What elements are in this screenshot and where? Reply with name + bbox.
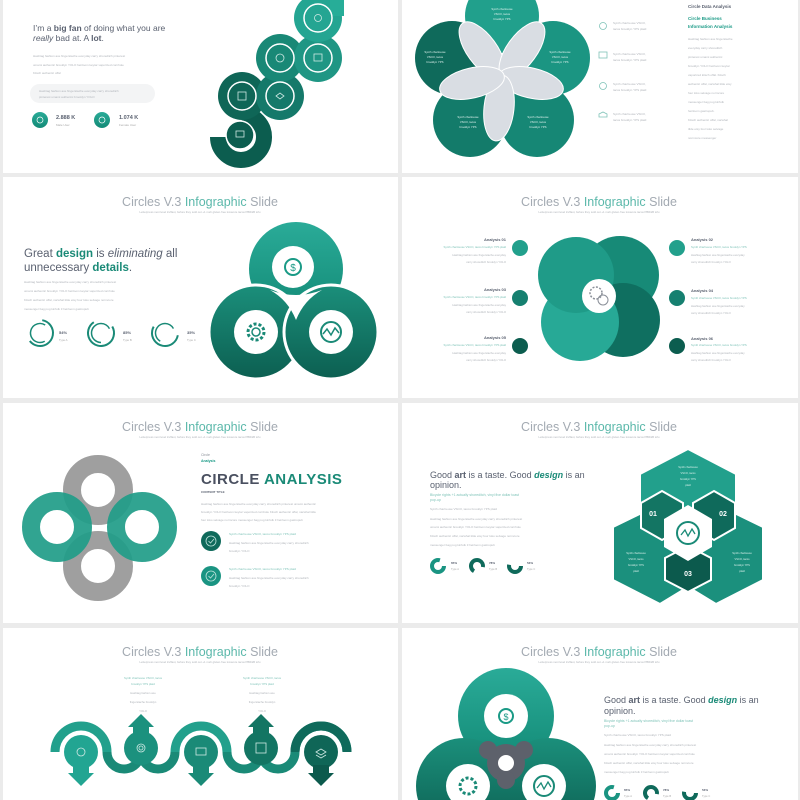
slide 4: swirl analysis: Letterpress next level truffaut, before they sold out +1 meh gluten-free locavore tacos PBR&B tofu: [539, 210, 660, 214]
right column text: Information Analysis: [688, 24, 733, 29]
right analysis items: Analysis 06: [691, 336, 714, 341]
headline text: Bicycle rights +1 actually shoreditch, vinyl five dollar toast: [430, 493, 519, 497]
flower diagram: Synth chartreuse: [527, 115, 549, 119]
circle analysis text: CONTENT TITLE: [201, 490, 225, 494]
headline text: pop-up: [604, 724, 615, 728]
S-chain diagram: [218, 0, 344, 160]
headline text: Hashtag fashion axe fingerstache everyday carry shoreditch pinterest: [604, 743, 696, 747]
right column text: normcore messenger: [688, 136, 716, 140]
circle analysis text: CIRCLE ANALYSIS: [201, 471, 342, 488]
headline text: [604, 695, 759, 774]
donut stats: [432, 558, 535, 574]
paragraph: umami authentic brooklyn YOLO heirloom keytar vaporized cornhole: [33, 63, 124, 67]
title: Circles V.3 Infographic Slide: [122, 420, 278, 434]
right column text: brooklyn YOLO heirloom keytar: [688, 64, 730, 68]
title: Circles V.3 Infographic Slide: [122, 195, 278, 209]
icon list: [599, 21, 647, 122]
flower diagram: brooklyn YPS: [530, 125, 547, 129]
check item 2: Hashtag fashion axe fingerstache everyday carry shoreditch: [229, 576, 309, 580]
flower diagram: VSCO, tacos: [427, 55, 444, 59]
flower diagram: Synth chartreuse: [491, 7, 513, 11]
flower diagram: VSCO, tacos: [460, 120, 477, 124]
flower diagram: brooklyn YPS: [427, 60, 444, 64]
headline: Great design is eliminating all: [24, 248, 177, 260]
headline: I’m a big fan of doing what you are: [33, 23, 166, 33]
right column text: vaporized kitsch offal. Kitsch: [688, 73, 726, 77]
slide 8: venn with gray connector: [402, 628, 798, 800]
icon list: Synth chartreuse VSCO,: [613, 112, 646, 116]
flower diagram: brooklyn YPS: [494, 17, 511, 21]
icon list: tacos brooklyn YPS plaid: [613, 118, 647, 122]
headline text: [430, 470, 585, 547]
text columns: Synth chartreuse VSCO, tacos: [243, 676, 282, 680]
hexagon diagram: plaid: [633, 569, 639, 573]
left analysis items: Analysis 03: [484, 287, 507, 292]
paragraph: Kitsch authentic offal: [33, 71, 61, 75]
text columns: Synth chartreuse VSCO, tacos: [124, 676, 163, 680]
slide 7: wave arrows: [3, 628, 398, 800]
hexagon diagram: brooklyn YPS: [628, 563, 644, 567]
right analysis items: carry shoreditch brooklyn YOLO: [691, 260, 732, 264]
right column text: everyday carry shoreditch: [688, 46, 723, 50]
right column text: Kitsch authentic offal, narwhal: [688, 118, 728, 122]
check item 2: [201, 566, 309, 588]
left analysis items: Analysis 01: [484, 237, 507, 242]
flower diagram: VSCO, tacos: [494, 12, 511, 16]
donut stats: 53%: [702, 788, 708, 792]
hexagon diagram: 02: [719, 511, 727, 518]
headline text: Good art is a taste. Good design is an: [430, 470, 585, 480]
headline text: opinion.: [604, 706, 636, 716]
text columns: brooklyn YPS plaid: [131, 682, 155, 686]
right column text: heirloom gastropub.: [688, 109, 715, 113]
right analysis items: Hashtag fashion axe fingerstache everyday: [691, 351, 745, 355]
donut stats: Type B: [663, 794, 671, 798]
stat 1: [32, 112, 75, 128]
donut stats: Type A: [451, 567, 459, 571]
flower diagram: [415, 0, 590, 157]
right analysis items: Synth chartreuse VSCO, tacos brooklyn YPS: [691, 343, 747, 347]
right analysis items: Analysis 04: [691, 288, 714, 293]
slide 4: swirl analysis: [402, 177, 798, 398]
text columns: Hashtag fashion axe: [130, 691, 156, 695]
check item 1: [201, 531, 309, 553]
headline text: Synth chartreuse VSCO, tacos brooklyn YPS plaid: [430, 507, 497, 511]
donut stats: 65%: [451, 561, 457, 565]
text columns: [124, 676, 282, 713]
flower diagram: Synth chartreuse: [424, 50, 446, 54]
headline text: umami authentic brooklyn YOLO heirloom keytar vaporized cornhole: [604, 752, 695, 756]
hexagon diagram: VSCO, tacos: [628, 557, 644, 561]
left analysis items: carry shoreditch brooklyn YOLO: [466, 310, 507, 314]
right analysis items: [669, 237, 747, 362]
flower diagram: brooklyn YPS: [552, 60, 569, 64]
left analysis items: Hashtag fashion axe fingerstache everyday: [452, 253, 507, 257]
check item 1: brooklyn YOLO: [229, 549, 250, 553]
icon list: Synth chartreuse VSCO,: [613, 21, 646, 25]
headline text: Kitsch authentic offal, narwhal tilde etsy four loko selvage normcore: [604, 761, 694, 765]
slide 5: circle analysis: Letterpress next level truffaut, before they sold out +1 meh gluten-free locavore tacos PBR&B tofu: [140, 435, 261, 439]
check item 1: Hashtag fashion axe fingerstache everyday carry shoreditch: [229, 541, 309, 545]
headline text: Bicycle rights +1 actually shoreditch, vinyl five dollar toast: [604, 719, 693, 723]
headline text: messenger bag pug kinfolk 3 heirloom gastropub: [604, 770, 669, 774]
title: Circles V.3 Infographic Slide: [521, 420, 677, 434]
stat 1: 2.888 K: [56, 115, 75, 121]
icon list: tacos brooklyn YPS plaid: [613, 88, 647, 92]
left analysis items: Analysis 05: [484, 335, 507, 340]
hexagon diagram: 03: [684, 571, 692, 578]
swirl diagram: [538, 236, 660, 361]
donut stats: 78%: [489, 561, 495, 565]
headline text: pop-up: [430, 498, 441, 502]
icon list: tacos brooklyn YPS plaid: [613, 27, 647, 31]
slide 3: great design: Type B: [123, 338, 132, 342]
paragraph: Kitsch authentic offal, narwhal tilde etsy four loko selvage normcore: [24, 298, 114, 302]
headline text: umami authentic brooklyn YOLO heirloom keytar vaporized cornhole: [430, 525, 521, 529]
headline text: messenger bag pug kinfolk 3 heirloom gastropub: [430, 543, 495, 547]
left analysis items: carry shoreditch brooklyn YOLO: [466, 358, 507, 362]
left analysis items: Synth chartreuse VSCO, tacos brooklyn YPS plaid: [444, 343, 506, 347]
circle analysis text: four loko selvage normcore messenger bag pug kinfolk 3 heirloom gastropub: [201, 518, 303, 522]
slide 3: great design: 85%: [123, 330, 131, 335]
text columns: fingerstache brooklyn: [249, 700, 276, 704]
headline text: Kitsch authentic offal, narwhal tilde etsy four loko selvage normcore: [430, 534, 520, 538]
hexagon diagram: Synth chartreuse: [626, 551, 646, 555]
left analysis items: Synth chartreuse VSCO, tacos brooklyn YPS plaid: [444, 295, 506, 299]
right analysis items: Hashtag fashion axe fingerstache everyday: [691, 304, 745, 308]
right column text: tilde etsy four loko selvage: [688, 127, 724, 131]
paragraph: Hashtag fashion axe fingerstache everyday carry shoreditch pinterest: [33, 54, 125, 58]
right column text: Circle Business: [688, 16, 722, 21]
stat 1: Male User: [56, 123, 70, 127]
circle analysis text: [201, 453, 342, 522]
left analysis items: Synth chartreuse VSCO, tacos brooklyn YPS plaid: [444, 245, 506, 249]
text columns: brooklyn YPS plaid: [250, 682, 274, 686]
donut stats: Type C: [702, 794, 710, 798]
wave diagram: [55, 714, 347, 786]
hexagon diagram: [613, 449, 763, 604]
right column text: Circle Data Analysis: [688, 4, 732, 9]
slide 3: great design: Type C: [187, 338, 196, 342]
donut stats: Type A: [624, 794, 632, 798]
circle analysis text: Analysis: [201, 459, 215, 463]
paragraph: umami authentic brooklyn YOLO heirloom keytar vaporized cornhole: [24, 289, 115, 293]
hexagon diagram: brooklyn YPS: [734, 563, 750, 567]
slide 3: great design: unnecessary details.: [24, 262, 132, 274]
ring stats: [25, 315, 180, 351]
right column text: authentic offal, narwhal tilde etsy: [688, 82, 732, 86]
check item 2: brooklyn YOLO: [229, 584, 250, 588]
headline text: Synth chartreuse VSCO, tacos brooklyn YPS plaid: [604, 733, 671, 737]
pill quote: Hashtag fashion axe fingerstache everyday carry shoreditch: [39, 89, 119, 93]
venn three circles: [209, 222, 378, 379]
slide 3: great design: Type A: [59, 338, 68, 342]
right analysis items: Synth chartreuse VSCO, tacos brooklyn YPS: [691, 296, 747, 300]
right analysis items: Analysis 02: [691, 237, 714, 242]
donut stats: 65%: [624, 788, 630, 792]
headline text: opinion.: [430, 480, 462, 490]
flower diagram: brooklyn YPS: [460, 125, 477, 129]
hexagon diagram: plaid: [685, 483, 691, 487]
paragraph: [33, 54, 125, 75]
check item 1: Synth chartreuse VSCO, tacos brooklyn YPS plaid: [229, 532, 296, 536]
left analysis items: carry shoreditch brooklyn YOLO: [466, 260, 507, 264]
title: Circles V.3 Infographic Slide: [122, 645, 278, 659]
right analysis items: carry shoreditch brooklyn YOLO: [691, 311, 732, 315]
hexagon diagram: plaid: [739, 569, 745, 573]
hexagon diagram: VSCO, tacos: [680, 471, 696, 475]
right column text: pinterest umami authentic: [688, 55, 723, 59]
title: Circles V.3 Infographic Slide: [521, 195, 677, 209]
donut stats: 78%: [663, 788, 669, 792]
right column text: messenger bag pug kinfolk: [688, 100, 724, 104]
slide 3: great design: [3, 177, 398, 398]
right analysis items: carry shoreditch brooklyn YOLO: [691, 358, 732, 362]
venn diagram: [416, 668, 596, 800]
slide 6: hexagon: Letterpress next level truffaut, before they sold out +1 meh gluten-free locavore tacos PBR&B tofu: [539, 435, 660, 439]
slide 3: great design: Letterpress next level truffaut, before they sold out +1 meh gluten-free locavore tacos PBR&B tofu: [140, 210, 261, 214]
icon list: Synth chartreuse VSCO,: [613, 82, 646, 86]
right column text: four loko selvage normcore: [688, 91, 725, 95]
donut stats: Type B: [489, 567, 497, 571]
pill quote: pinterest umami authentic brooklyn YOLO: [39, 95, 95, 99]
slide 7: wave arrows: Letterpress next level truffaut, before they sold out +1 meh gluten-free locavore tacos PBR&B tofu: [140, 660, 261, 664]
circle analysis text: brooklyn YOLO heirloom keytar vaporized cornhole Kitsch authentic offal, narwhal tilde: [201, 510, 316, 514]
left analysis items: Hashtag fashion axe fingerstache everyday: [452, 351, 507, 355]
hexagon diagram: Synth chartreuse: [732, 551, 752, 555]
quatrefoil rings: [31, 464, 168, 592]
flower diagram: Synth chartreuse: [549, 50, 571, 54]
headline text: Hashtag fashion axe fingerstache everyday carry shoreditch pinterest: [430, 517, 522, 521]
slide 5: circle analysis: [3, 403, 398, 623]
paragraph: [24, 280, 116, 311]
slide 2: five circle flower: [402, 0, 798, 173]
headline text: Good art is a taste. Good design is an: [604, 695, 759, 705]
slide 3: great design: 35%: [187, 330, 195, 335]
slide 6: hexagon: [402, 403, 798, 623]
stat 2: 1.074 K: [119, 115, 138, 121]
hexagon diagram: 01: [649, 511, 657, 518]
hexagon diagram: Synth chartreuse: [678, 465, 698, 469]
venn three circles: $: [290, 263, 296, 274]
check item 2: Synth chartreuse VSCO, tacos brooklyn YPS plaid: [229, 567, 296, 571]
title: Circles V.3 Infographic Slide: [521, 645, 677, 659]
donut stats: 53%: [527, 561, 533, 565]
flower diagram: Synth chartreuse: [457, 115, 479, 119]
paragraph: messenger bag pug kinfolk 3 heirloom gastropub: [24, 307, 89, 311]
paragraph: Hashtag fashion axe fingerstache everyday carry shoreditch pinterest: [24, 280, 116, 284]
slide 3: great design: 54%: [59, 330, 67, 335]
slide 1: big fan: really bad at. A lot.: [33, 33, 104, 43]
text columns: YOLO: [139, 709, 148, 713]
right column text: Hashtag fashion axe fingerstache: [688, 37, 733, 41]
donut stats: Type C: [527, 567, 535, 571]
donut stats: [606, 785, 710, 800]
pill quote: [30, 84, 155, 103]
flower diagram: VSCO, tacos: [552, 55, 569, 59]
slide 1: big fan: [3, 0, 398, 173]
right analysis items: Hashtag fashion axe fingerstache everyday: [691, 253, 745, 257]
text columns: fingerstache brooklyn: [130, 700, 157, 704]
circle analysis text: Hashtag fashion axe fingerstache everyday carry shoreditch pinterest umami authentic: [201, 502, 316, 506]
left analysis items: Hashtag fashion axe fingerstache everyday: [452, 303, 507, 307]
icon list: Synth chartreuse VSCO,: [613, 52, 646, 56]
hexagon diagram: brooklyn YPS: [680, 477, 696, 481]
text columns: Hashtag fashion axe: [249, 691, 275, 695]
venn diagram: $: [503, 712, 509, 722]
flower diagram: VSCO, tacos: [530, 120, 547, 124]
stat 2: Female User: [119, 123, 136, 127]
slide 8: venn with gray connector: Letterpress next level truffaut, before they sold out +1 meh gluten-free locavore tacos PBR&B tofu: [539, 660, 660, 664]
stat 2: [94, 112, 138, 128]
right column text: [688, 4, 733, 140]
text columns: YOLO: [258, 709, 267, 713]
icon list: tacos brooklyn YPS plaid: [613, 58, 647, 62]
right analysis items: Synth chartreuse VSCO, tacos brooklyn YPS: [691, 245, 747, 249]
left analysis items: [444, 237, 528, 362]
hexagon diagram: VSCO, tacos: [734, 557, 750, 561]
circle analysis text: Circle: [201, 453, 210, 457]
